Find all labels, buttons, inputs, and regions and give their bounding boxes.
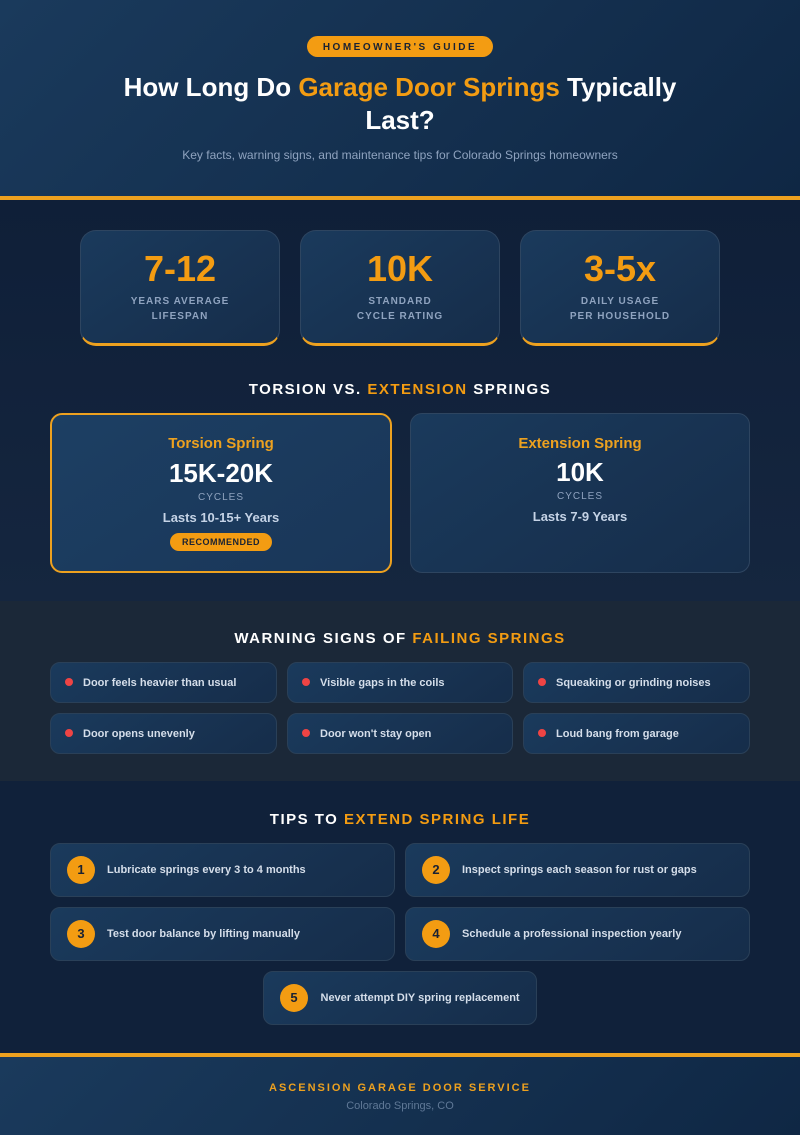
torsion lifespan: Lasts 10-15+ Years [163, 510, 279, 525]
extension name: Extension Spring [518, 435, 642, 452]
stat card: daily usage: PER HOUSEHOLD [570, 311, 670, 322]
stat card: lifespan [80, 230, 280, 346]
stat card: lifespan: YEARS AVERAGE [131, 296, 229, 307]
header [0, 0, 800, 200]
warning: heavier: Door feels heavier than usual [83, 677, 236, 689]
subtitle: Key facts, warning signs, and maintenance tips for Colorado Springs homeowners [182, 148, 618, 162]
panel: warning signs [0, 601, 800, 781]
warning: loud bang [523, 713, 750, 754]
tip 2: Inspect springs each season for rust or gaps [462, 864, 697, 876]
recommended pill [170, 533, 272, 551]
warning: won't stay open: Door won't stay open [320, 728, 431, 740]
badge: homeowner's guide [307, 36, 493, 57]
tip 3: Test door balance by lifting manually [107, 928, 300, 940]
stat card: cycle rating: CYCLE RATING [357, 311, 443, 322]
stat card: cycle rating: STANDARD [368, 296, 432, 307]
heading: torsion vs extension: TORSION VS. EXTENSION SPRINGS [249, 381, 551, 398]
tip 3: 3 [77, 926, 85, 941]
tip 5 [263, 971, 537, 1025]
tip 4: 4 [432, 926, 440, 941]
heading: tips: TIPS TO EXTEND SPRING LIFE [270, 811, 530, 828]
panel: extension spring [410, 413, 750, 573]
heading: warning signs: WARNING SIGNS OF FAILING SPRINGS [234, 630, 566, 647]
torsion cycles label: CYCLES [198, 492, 244, 503]
warning: gaps: Visible gaps in the coils [320, 677, 445, 689]
recommended pill: RECOMMENDED [182, 537, 260, 547]
tip 1: 1 [77, 862, 85, 877]
stat card: cycle rating [300, 230, 500, 346]
title [124, 72, 676, 135]
stat card: daily usage: DAILY USAGE [581, 296, 659, 307]
tip 2: 2 [432, 862, 440, 877]
stat card: lifespan: LIFESPAN [152, 311, 208, 322]
warning: uneven [50, 713, 277, 754]
torsion name: Torsion Spring [168, 435, 274, 452]
stat card: lifespan: 7-12 [144, 248, 216, 289]
footer [0, 1053, 800, 1135]
tip 1: Lubricate springs every 3 to 4 months [107, 864, 306, 876]
warning: noises [523, 662, 750, 703]
extension cycles label: CYCLES [557, 491, 603, 502]
extension cycles: 10K [556, 457, 604, 487]
title: Last? [365, 105, 435, 135]
panel: torsion spring [50, 413, 392, 573]
tip 5: 5 [290, 990, 298, 1005]
stat card: cycle rating: 10K [367, 248, 433, 289]
warning: gaps [287, 662, 513, 703]
tip 2 [405, 843, 750, 897]
warning: loud bang: Loud bang from garage [556, 728, 679, 740]
tip 4 [405, 907, 750, 961]
tip 3 [50, 907, 395, 961]
torsion cycles: 15K-20K [169, 458, 273, 488]
extension lifespan: Lasts 7-9 Years [533, 509, 627, 524]
warning: noises: Squeaking or grinding noises [556, 677, 711, 689]
title: How Long Do Garage Door Springs Typically [124, 72, 676, 102]
badge: homeowner's guide: HOMEOWNER'S GUIDE [323, 42, 477, 53]
warning: uneven: Door opens unevenly [83, 728, 195, 740]
warning: heavier [50, 662, 277, 703]
footer company name: ASCENSION GARAGE DOOR SERVICE [269, 1082, 531, 1094]
warning: won't stay open [287, 713, 513, 754]
tip 5: Never attempt DIY spring replacement [320, 992, 520, 1004]
stat card: daily usage [520, 230, 720, 346]
tip 4: Schedule a professional inspection yearly [462, 928, 681, 940]
stat card: daily usage: 3-5x [584, 248, 656, 289]
footer location: Colorado Springs, CO [346, 1100, 454, 1112]
tip 1 [50, 843, 395, 897]
